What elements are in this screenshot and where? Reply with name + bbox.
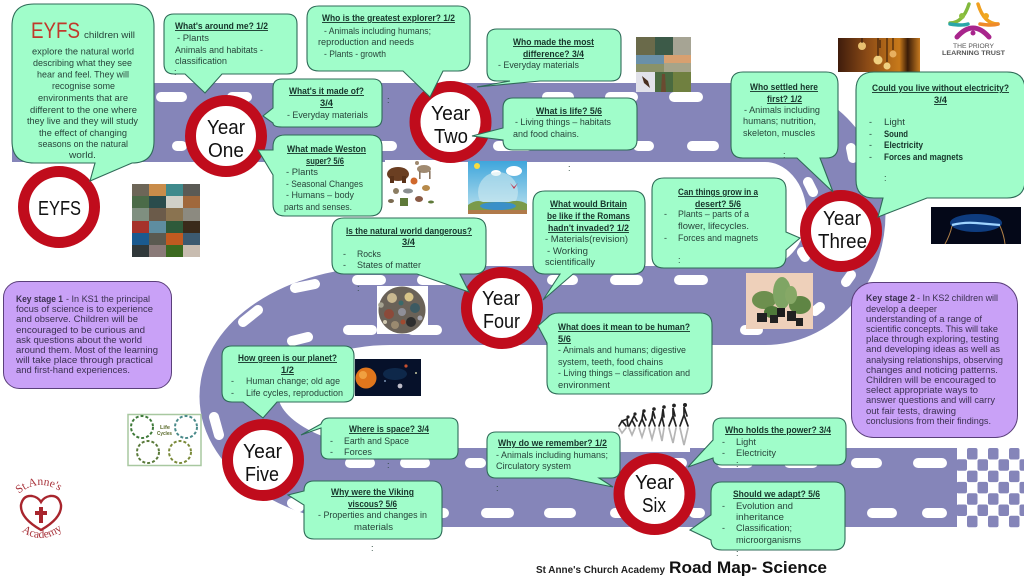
callout: What's it made of: 3/4 <box>320 98 333 108</box>
callout: live without electricity: Electricity <box>884 140 923 150</box>
callout: Viking: materials <box>354 522 394 532</box>
callout: greatest explorer <box>307 6 470 97</box>
callout: live without electricity: 3/4 <box>934 95 947 105</box>
stray colon marks: : <box>357 283 360 293</box>
callout: What is life <box>472 98 637 150</box>
panel: key stage 1: ask questions about the world <box>16 335 142 345</box>
callout: Weston super: - Plants <box>286 167 319 177</box>
callout: mean to be human: - Animals and humans; digestive <box>558 345 686 355</box>
callout: What's around me: What's around me? 1/2 <box>175 21 268 31</box>
panel: key stage 1: Key stage 1 <box>16 294 63 304</box>
callout: natural world dangerous: - <box>343 249 346 259</box>
callout: Who settled here first: Who settled here <box>750 82 818 92</box>
callout: EYFS intro: describing what they see <box>33 58 132 68</box>
callout: live without electricity: Forces and magnets <box>884 152 963 162</box>
panel: key stage 2: and developing ideas as well as <box>866 344 1001 354</box>
logo: The Priory Learning Trust: LEARNING TRUST <box>942 50 1005 57</box>
callout: grow in a desert <box>652 178 800 268</box>
callout: Who holds the power: - <box>722 448 725 458</box>
logo: St Anne's Academy: Academy <box>22 526 61 538</box>
milestone: EYFS <box>24 172 94 242</box>
callout: live without electricity: : <box>884 173 887 183</box>
callout: Should we adapt: inheritance <box>736 512 784 522</box>
stray colon marks: : <box>387 95 390 105</box>
callout: Viking <box>288 481 442 553</box>
milestone: Year Six: Six <box>642 495 666 517</box>
callout: What is life: and food chains. <box>513 129 579 139</box>
logo: The Priory Learning Trust <box>942 4 1005 57</box>
callout: Why do we remember: Why do we remember? 1/2 <box>498 438 607 448</box>
callout: EYFS intro: children will <box>84 30 135 40</box>
callout: EYFS intro <box>12 4 154 181</box>
callout: Romans: scientifically <box>545 257 596 267</box>
callout: live without electricity: - <box>869 152 872 162</box>
logo: St Anne's Academy: St.Anne's <box>16 478 62 493</box>
callout: How green is our planet: Human change; old age <box>246 376 340 386</box>
reflection of evolution figures <box>619 428 688 445</box>
image: planets <box>355 359 421 396</box>
callout: live without electricity <box>856 72 1024 217</box>
callout: Who settled here first: - Animals including <box>744 105 820 115</box>
image: life cycles <box>128 414 201 466</box>
milestone: Year Five <box>228 424 298 496</box>
callout: mean to be human <box>538 313 712 394</box>
panel: key stage 2: scientific concepts. This will take <box>866 324 998 334</box>
logo: The Priory Learning Trust: THE PRIORY <box>953 44 994 50</box>
milestone: EYFS: EYFS <box>38 198 81 220</box>
callout: greatest explorer: reproduction and needs <box>318 37 414 47</box>
callout: Who holds the power <box>688 418 846 469</box>
callout: How green is our planet: - <box>231 388 234 398</box>
callout: live without electricity: Light <box>884 117 906 127</box>
panel: key stage 2: answer questions and will carry <box>866 395 996 405</box>
callout: natural world dangerous: Is the natural world dangerous? <box>346 226 472 236</box>
callout: Where is space: Earth and Space <box>344 436 409 446</box>
callout: Why do we remember <box>487 432 620 493</box>
milestone: Year Three: Three <box>818 231 867 253</box>
callout: grow in a desert: Can things grow in a <box>678 187 759 197</box>
callout: most difference: difference? 3/4 <box>523 49 584 59</box>
milestone: Year Six <box>619 458 690 530</box>
callout: live without electricity: - <box>869 117 872 127</box>
callout: What's it made of <box>263 79 382 127</box>
callout: Where is space: - <box>330 447 333 457</box>
panel: key stage 2: out fair tests, drawing <box>866 406 956 416</box>
callout: Should we adapt <box>690 482 845 558</box>
milestone: Year Four: Year <box>482 288 520 310</box>
callout: EYFS intro: environments that are <box>38 93 128 103</box>
milestone: Year Five: Year <box>243 441 282 463</box>
panel: key stage 2: - In KS2 children will <box>917 293 998 303</box>
callout: Who holds the power: Who holds the power? 3/4 <box>725 425 831 435</box>
callout: What's around me: classification <box>175 56 227 66</box>
callout: mean to be human: What does it mean to be human? <box>558 322 690 332</box>
callout: How green is our planet: - <box>231 376 234 386</box>
callout: natural world dangerous <box>332 218 486 292</box>
callout: greatest explorer: - Plants - growth <box>324 49 386 59</box>
logo: St Anne's Academy <box>16 478 62 538</box>
panel: key stage 1: and observe. Children will be <box>16 314 138 324</box>
callout: live without electricity: Could you live without electricity? <box>872 83 1009 93</box>
image: life cycles: Life <box>160 425 170 431</box>
callout: What's it made of: - Everyday materials <box>287 110 368 120</box>
callout: grow in a desert: Forces and magnets <box>678 233 758 243</box>
milestone: Year Two <box>415 86 486 158</box>
callout: Viking: - Properties and changes in <box>318 510 427 520</box>
callout: What is life: - Living things – habitats <box>515 117 611 127</box>
callout: Weston super: super? 5/6 <box>306 156 344 166</box>
panel: key stage 1 <box>4 282 172 388</box>
callout: EYFS intro: the effect of changing <box>39 128 127 138</box>
panel: key stage 1: encouraged to be curious and <box>16 325 145 335</box>
callout: Romans <box>533 191 645 300</box>
image: human evolution <box>607 403 690 452</box>
callout: Weston super: - Humans – body <box>286 190 354 200</box>
callout: most difference <box>477 29 621 87</box>
callout: What's around me: - Plants <box>177 33 210 43</box>
stray colon marks: : <box>568 163 571 173</box>
callout: Who holds the power: : <box>736 459 739 469</box>
callout: mean to be human: - Living things – classification and <box>558 368 690 378</box>
callout: Where is space: Forces <box>344 447 372 457</box>
callout: Should we adapt: Classification; <box>736 523 792 533</box>
callout: grow in a desert: desert? 5/6 <box>695 199 741 209</box>
callout: Romans: - Materials(revision) <box>545 234 628 244</box>
callout: mean to be human: system, teeth, food chains <box>558 357 663 367</box>
milestone: Year Two: Two <box>434 126 468 148</box>
milestone: Year Six: Year <box>635 472 674 494</box>
panel: key stage 2: changes and noticing patterns. <box>866 365 998 375</box>
callout: EYFS intro: recognise some <box>52 81 115 91</box>
callout: How green is our planet: Life cycles, reproduction <box>246 388 343 398</box>
stray colon marks: : <box>387 460 390 470</box>
panel: key stage 1: - In KS1 the principal <box>66 294 150 304</box>
callout: Where is space <box>301 418 458 459</box>
milestone: Year One: Year <box>207 117 245 139</box>
callout: Weston super: What made Weston <box>287 144 366 154</box>
callout: mean to be human: environment <box>558 380 611 390</box>
milestone: Year One <box>190 100 262 172</box>
milestone: Year Four <box>466 272 538 344</box>
milestone: Year Three <box>806 196 876 266</box>
image: animals <box>385 160 440 208</box>
callout: EYFS intro: seasons on the natural <box>38 139 128 149</box>
image: electric arc <box>931 207 1021 244</box>
panel: key stage 2: develop a deeper <box>866 304 937 314</box>
road <box>12 97 1024 525</box>
callout: Viking: Why were the Viking <box>331 487 414 497</box>
callout: Viking: : <box>371 543 374 553</box>
callout: Why do we remember: : <box>496 483 499 493</box>
callout: Who settled here first: skeleton, muscles <box>743 128 816 138</box>
callout: Should we adapt: Evolution and <box>736 501 793 511</box>
callout: live without electricity: - <box>869 140 872 150</box>
callout: Romans: be like if the Romans <box>547 211 630 221</box>
callout: Who settled here first: humans; nutrition, <box>743 116 816 126</box>
image: light bulbs <box>838 38 920 72</box>
callout: EYFS intro: hear and feel. They will <box>37 70 129 80</box>
image: potted plants <box>746 273 813 329</box>
panel: key stage 2: analysing relationships, observing <box>866 355 1003 365</box>
callout: Where is space: Where is space? 3/4 <box>349 424 429 434</box>
road lane dashes <box>161 97 942 513</box>
title: St Anne's Church Academy <box>536 564 665 576</box>
callout: natural world dangerous: 3/4 <box>402 237 415 247</box>
callout: How green is our planet <box>222 346 354 418</box>
image: water cycle <box>468 161 527 214</box>
panel: key stage 1: focus of science is to experience <box>16 304 153 314</box>
callout: Weston super: - Seasonal Changes <box>286 179 363 189</box>
callout: Where is space: - <box>330 436 333 446</box>
callout: Should we adapt: : <box>736 548 739 558</box>
image: life cycles: Cycles <box>157 431 172 437</box>
callout: grow in a desert: flower, lifecycles. <box>678 221 749 231</box>
callout: Who settled here first <box>731 72 838 192</box>
milestone: Year Two: Year <box>431 103 470 125</box>
callout: Who holds the power: - <box>722 437 725 447</box>
callout: natural world dangerous: - <box>343 260 346 270</box>
image: habitats collage <box>636 37 691 92</box>
callout: Who settled here first: : <box>783 150 786 160</box>
callout: Romans: hadn't invaded? 1/2 <box>548 223 629 233</box>
callout: EYFS intro: explore the natural world <box>32 46 134 56</box>
panel: key stage 2: understanding of a range of <box>866 314 983 324</box>
callout: natural world dangerous: Rocks <box>357 249 381 259</box>
callout: Should we adapt: - <box>722 501 725 511</box>
milestone: Year Five: Five <box>245 464 279 486</box>
callout: What is life: What is life? 5/6 <box>536 106 602 116</box>
callout: natural world dangerous: States of matter <box>357 260 421 270</box>
callout: live without electricity: - <box>869 129 872 139</box>
panel: key stage 2: Key stage 2 <box>866 293 915 303</box>
callout: EYFS intro: different to the one where <box>30 105 137 115</box>
callout: greatest explorer: - Animals including humans; <box>324 26 431 36</box>
milestone: Year Four: Four <box>483 311 520 333</box>
callout: What's it made of: What's it made of? <box>289 86 364 96</box>
title <box>536 558 827 576</box>
callout: grow in a desert: - <box>664 209 667 219</box>
road checkered end <box>958 450 1024 525</box>
callout: Weston super: parts and senses. <box>284 202 352 212</box>
callout: Romans: What would Britain <box>550 199 627 209</box>
panel: key stage 1: will take place through practical <box>15 355 153 365</box>
callout: EYFS intro: EYFS <box>31 18 80 43</box>
callout: Why do we remember: Circulatory system <box>496 461 571 471</box>
panel: key stage 2: conclusions from their findings. <box>866 416 991 426</box>
callout: grow in a desert: : <box>678 255 681 265</box>
callout: How green is our planet: How green is our planet? <box>238 353 337 363</box>
callout: live without electricity: Sound <box>884 129 908 139</box>
callout: greatest explorer: Who is the greatest explorer? 1/2 <box>322 13 455 23</box>
callout: mean to be human: 5/6 <box>558 334 571 344</box>
callout: most difference: Who made the most <box>513 37 594 47</box>
milestone: Year Three: Year <box>823 208 861 230</box>
callout: grow in a desert: Plants – parts of a <box>678 209 749 219</box>
callout: Who holds the power: Electricity <box>736 448 777 458</box>
callout: Should we adapt: microorganisms <box>736 535 802 545</box>
callout: Romans: - Working <box>547 246 588 256</box>
callout: EYFS intro: world. <box>68 150 96 160</box>
callout: Who settled here first: first? 1/2 <box>767 94 802 104</box>
callout: What's around me <box>164 14 297 93</box>
callout: How green is our planet: 1/2 <box>281 365 294 375</box>
panel: key stage 1: around them. Most of the learning <box>16 345 158 355</box>
panel: key stage 2: place through exploring, testing <box>866 334 999 344</box>
callout: Who holds the power: Light <box>736 437 756 447</box>
callout: EYFS intro: they live and they will study <box>27 116 139 126</box>
panel: key stage 1: and first-hand experiences. <box>16 365 130 375</box>
panel: key stage 2: select appropriate ways to <box>866 385 978 395</box>
panel: key stage 2: Children will be encouraged to <box>866 375 996 385</box>
callout: Viking: viscous? 5/6 <box>348 499 397 509</box>
milestone: Year One: One <box>208 140 244 162</box>
image: rocks <box>377 286 428 334</box>
callout: What's around me: Animals and habitats - <box>175 45 263 55</box>
callout: Should we adapt: Should we adapt? 5/6 <box>733 489 820 499</box>
callout: grow in a desert: - <box>664 233 667 243</box>
callout: What's around me: : <box>174 67 177 77</box>
image: wildlife collage <box>132 184 200 257</box>
callout: Weston super <box>258 135 382 216</box>
panel: key stage 2 <box>852 282 1018 438</box>
stray colon marks <box>357 95 571 470</box>
callout: Why do we remember: - Animals including humans; <box>496 450 608 460</box>
callout: most difference: - Everyday materials <box>498 60 579 70</box>
callout: Should we adapt: - <box>722 523 725 533</box>
